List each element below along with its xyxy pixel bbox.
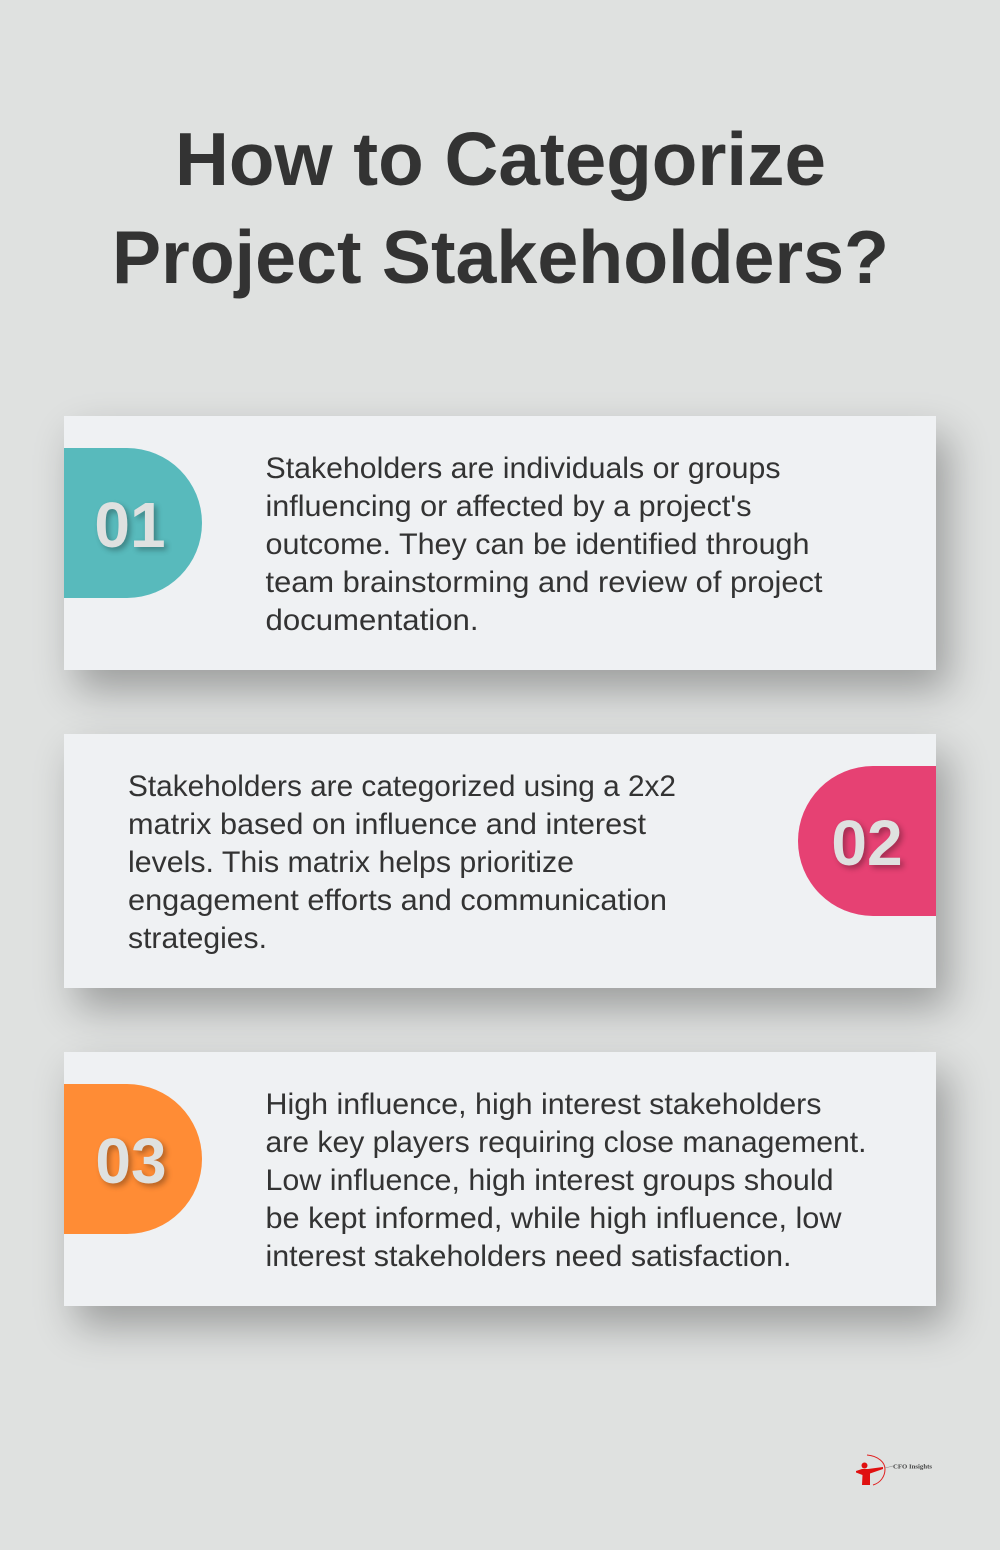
badge: 01: 01: [94, 489, 166, 561]
text block: step 03: [266, 1088, 866, 1273]
text block: step 03: are key players requiring close management.: [266, 1126, 866, 1159]
badge: 01: [64, 448, 202, 598]
logo: CFO Insights: [856, 1454, 933, 1486]
text block: step 01: outcome. They can be identified through: [266, 528, 810, 561]
logo wordmark: CFO Insights: [893, 1464, 933, 1470]
text block: step 03: be kept informed, while high influence, low: [266, 1202, 842, 1235]
text block: step 02: [128, 770, 676, 955]
text block: step 02: matrix based on influence and interest: [128, 808, 646, 841]
text block: step 01: documentation.: [266, 604, 478, 637]
text block: step 02: Stakeholders are categorized using a 2x2: [128, 770, 676, 803]
panel: step 02: [64, 734, 936, 988]
text block: step 03: Low influence, high interest groups should: [266, 1164, 834, 1197]
text block: step 02: engagement efforts and communication: [128, 884, 667, 917]
badge: 02: [798, 766, 936, 916]
text block: step 02: levels. This matrix helps prioritize: [128, 846, 574, 879]
badge: 03: [64, 1084, 202, 1234]
title: How to Categorize: [175, 117, 826, 201]
text block: step 03: High influence, high interest stakeholders: [266, 1088, 822, 1121]
text block: step 01: [266, 452, 822, 637]
panel: step 03: [64, 1052, 936, 1306]
panel: step 01: [64, 416, 936, 670]
text block: step 01: influencing or affected by a project's: [266, 490, 752, 523]
title: Project Stakeholders?: [112, 215, 889, 299]
badge: 02: 02: [831, 807, 903, 879]
icon: red archer: [856, 1455, 893, 1485]
title: [112, 117, 889, 299]
text block: step 01: team brainstorming and review of project: [266, 566, 822, 599]
text block: step 02: strategies.: [128, 922, 267, 955]
badge: 03: 03: [95, 1125, 167, 1197]
text block: step 03: interest stakeholders need satisfaction.: [266, 1240, 792, 1273]
text block: step 01: Stakeholders are individuals or groups: [266, 452, 780, 485]
